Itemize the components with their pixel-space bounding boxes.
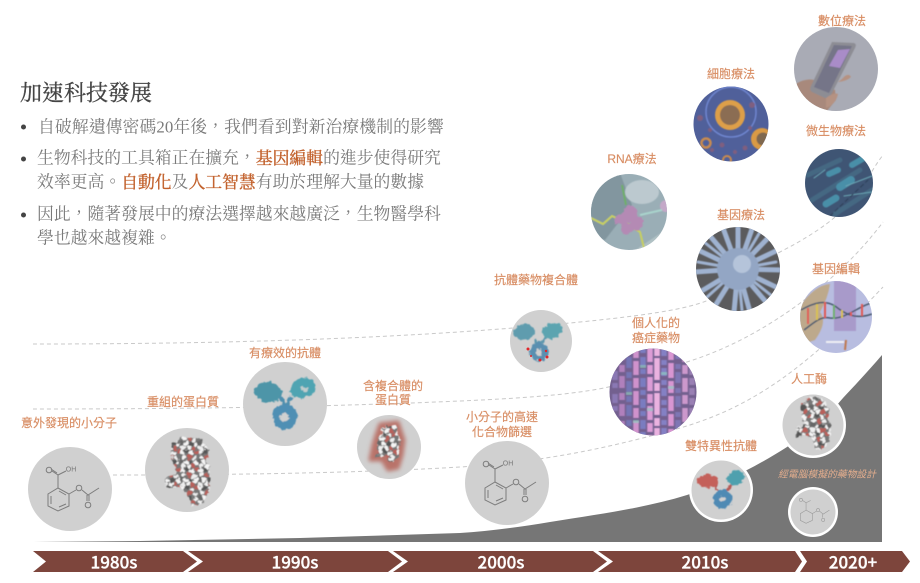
icon: high-throughput screening molecule — [465, 441, 549, 525]
trend line: lower — [113, 287, 883, 475]
heading: 加速科技發展 — [20, 80, 152, 106]
label: 個人化的 — [632, 315, 680, 330]
icon: cell therapy — [693, 86, 773, 164]
timeline band: 2010s — [682, 548, 728, 574]
chart: growth wedge — [33, 355, 882, 542]
icon: serendipitous small molecule: OH — [66, 466, 76, 474]
icon: multi-complex protein — [357, 415, 421, 479]
timeline band — [33, 548, 910, 574]
icon: microbial therapy — [805, 149, 873, 217]
label: 重組的蛋白質 — [147, 394, 219, 409]
icon: artificial enzyme — [780, 392, 846, 458]
timeline band: 1980s — [91, 548, 137, 574]
timeline band: 1990s — [272, 548, 318, 574]
icon: therapeutic antibody — [243, 362, 327, 446]
label: 數位療法 — [818, 13, 866, 28]
label: 人工酶 — [791, 371, 827, 386]
label: RNA療法 — [607, 152, 657, 166]
icon: RNA therapy — [590, 173, 672, 251]
text block: bullets: 自破解遺傳密碼20年後，我們看到對新治療機制的影響 — [38, 116, 444, 136]
icon: serendipitous small molecule — [28, 447, 112, 531]
icon: computer simulated drug design — [788, 487, 838, 537]
icon: personalized cancer drugs — [609, 348, 697, 436]
label: 含複合體的 — [363, 378, 423, 393]
timeline band: 2000s — [478, 548, 524, 574]
label: 抗體藥物複合體 — [494, 272, 578, 287]
text block: bullets: 學也越來越複雜。 — [37, 228, 172, 248]
label: 意外發現的小分子 — [21, 415, 117, 430]
label: 蛋白質 — [375, 392, 411, 407]
label: 有療效的抗體 — [249, 345, 321, 360]
label: 基因療法 — [717, 208, 765, 222]
label: 細胞療法 — [707, 67, 755, 81]
text block: bullets: 因此，隨著發展中的療法選擇越來越廣泛，生物醫學科 — [37, 204, 441, 224]
icon: bispecific antibody — [689, 458, 753, 522]
label: 經電腦模擬的藥物設計 — [778, 468, 877, 480]
icon: gene therapy — [695, 227, 782, 312]
trend line: middle — [33, 222, 883, 409]
text block: bullets: 效率更高。自動化及人工智慧有助於理解大量的數據 — [37, 172, 424, 192]
icon: antibody drug conjugate — [510, 310, 572, 372]
label: 化合物篩選 — [472, 424, 532, 439]
icon: gene editing — [800, 281, 872, 353]
icon: digital therapy — [793, 27, 878, 112]
icon: high-throughput screening molecule: OH — [503, 460, 513, 468]
timeline band: 2020+ — [829, 548, 878, 574]
icon: recombinant protein — [145, 428, 229, 512]
trend line: upper — [33, 155, 883, 344]
label: 基因編輯 — [812, 262, 860, 276]
text block: bullets — [21, 116, 444, 248]
label: 小分子的高速 — [466, 409, 538, 424]
label: 癌症藥物 — [632, 330, 680, 345]
label: 微生物療法 — [806, 123, 866, 138]
text block: bullets: 生物科技的工具箱正在擴充，基因編輯的進步使得研究 — [37, 148, 441, 168]
label: 雙特異性抗體 — [685, 438, 757, 453]
